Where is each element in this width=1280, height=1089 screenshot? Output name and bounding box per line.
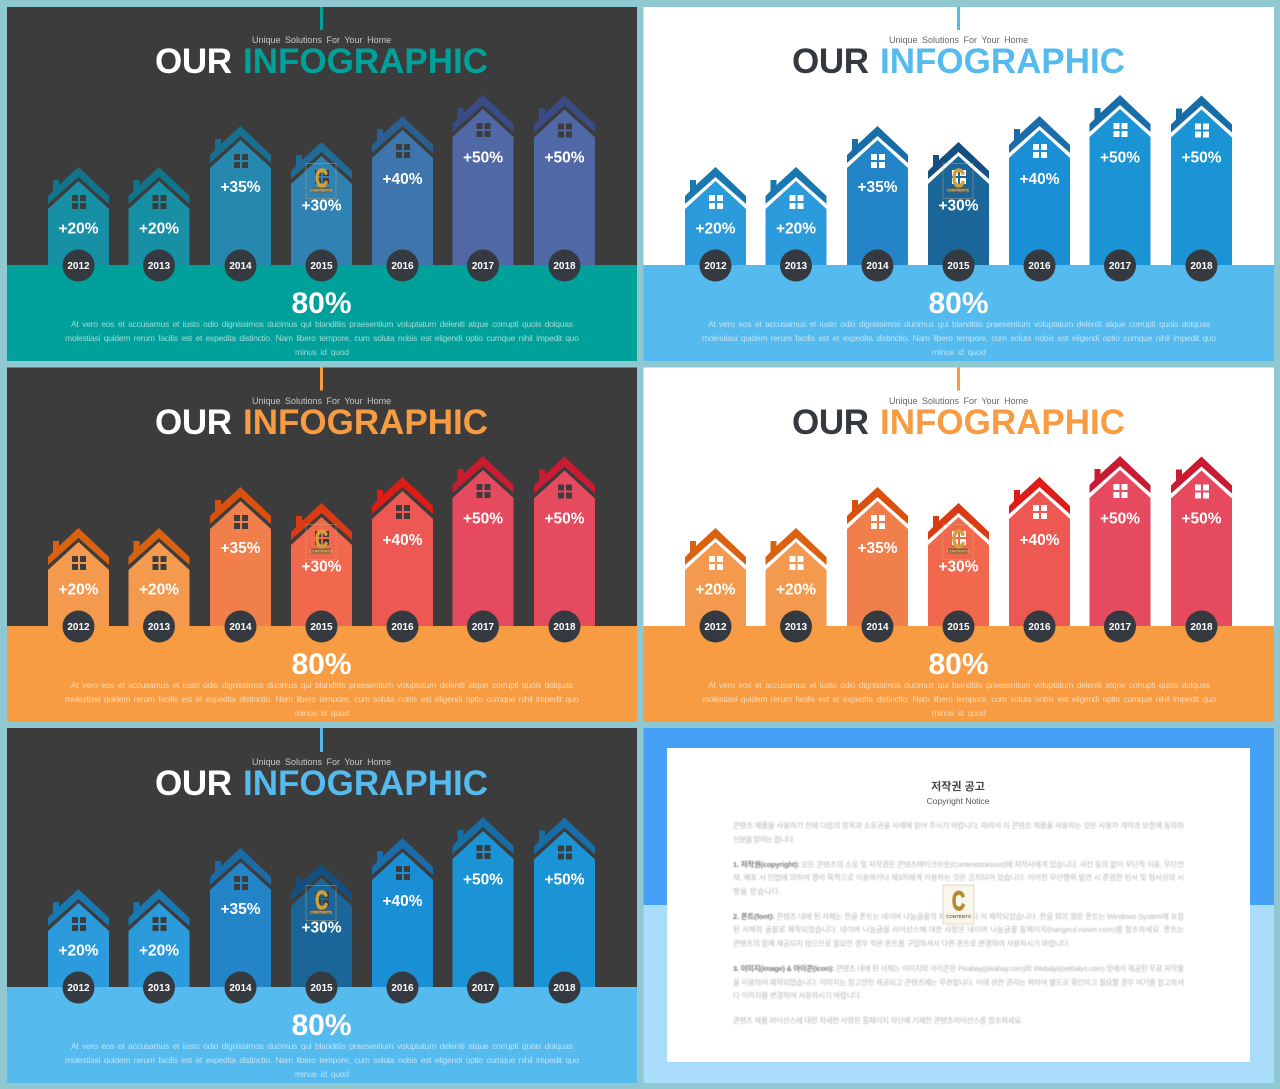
house 2012: 2012 [67, 622, 90, 633]
house 2014: +35% [220, 901, 261, 918]
notice text: 2. 폰트(font): 콘텐츠 내에 된 서체는 한글 폰트는 네이버 나눔글꼴의 저작물입니다 이 제작되었습니다. 한글 외의 영문 폰트는 Windows System에 포함 [733, 912, 1184, 921]
house 2014: 2014 [866, 622, 889, 633]
watermark logo [306, 524, 336, 560]
notice text: 콘텐츠의 함께 제공되지 않으므로 필요한 경우 적은 폰트를 구입하셔서 다른 폰트로 변경하여 사용하시기 바랍니다. [733, 939, 1070, 948]
title: OUR [155, 764, 232, 803]
body text: molestiasi quidem rerum facilis est et expedita distinctio. Nam libero tempore, cum soluta nobis est eligendi optio cumque nihil impedit quo [65, 694, 579, 704]
watermark logo: CONTENTS [946, 914, 971, 919]
body text: molestiasi quidem rerum facilis est et expedita distinctio. Nam libero tempore, cum soluta nobis est eligendi optio cumque nihil impedit quo [65, 1055, 579, 1065]
body text: At vero eos et accusamus et iusto odio dignissimos ducimus qui blanditiis praesentium voluptatum deleniti atque corrupti quois dolquas [71, 319, 573, 329]
watermark logo [306, 163, 336, 198]
house 2018: 2018 [1190, 261, 1213, 272]
body text: minus id quod [295, 1069, 349, 1079]
house 2013: 2013 [785, 622, 808, 633]
body text [65, 319, 579, 357]
subtitle: Unique Solutions For Your Home [889, 35, 1028, 45]
house 2013 [128, 889, 190, 1004]
house 2017 [452, 456, 514, 642]
top tick [957, 7, 960, 30]
top tick [320, 7, 323, 30]
big percentage: 80% [291, 1009, 352, 1042]
house 2015: +30% [301, 198, 342, 214]
house 2014: 2014 [229, 622, 252, 633]
title: INFOGRAPHIC [243, 764, 488, 803]
house 2017: +50% [1100, 510, 1140, 528]
big percentage: 80% [291, 648, 352, 681]
title: OUR [792, 42, 869, 81]
house 2016 [372, 838, 433, 1004]
title: OUR [792, 403, 869, 442]
house 2013 [128, 528, 190, 642]
house 2012: 2012 [67, 261, 90, 272]
house 2015: +30% [301, 558, 342, 576]
house 2017 [452, 95, 514, 282]
notice text: 1. 저작권(copyright): 모든 콘텐츠의 소유 및 저작권은 콘텐츠메이크아웃(Contentstokeout)에 저작사에게 있습니다. 사전 동의 없이 무단적 이용, 무단전 [733, 860, 1184, 869]
top tick [957, 368, 960, 390]
house 2012: +20% [58, 942, 99, 960]
house 2016 [1009, 477, 1070, 642]
panel: teal dark variant [7, 7, 637, 361]
house 2014 [847, 126, 908, 282]
house 2013: 2013 [148, 261, 171, 272]
panel: orange dark variant [7, 368, 637, 722]
house 2012 [48, 889, 109, 1004]
notice text: 3. 이미지(image) & 아이콘(icon): 콘텐츠 내에 된 서체는 이미지와 아이콘은 Pixabay(pixabay.com)와 Webalys(webalys.com) 등에서 제공된 무료 저작물 [733, 964, 1184, 973]
house 2013 [766, 167, 826, 282]
house 2014: +35% [220, 179, 261, 196]
notice text: 재, 배포 시 민법에 의하여 영리 목적으로 이용하거나 제3자에게 이용하는 것은 금지되어 있습니다. 이러한 무단행위 발견 시 준엄한 민사 및 형사상의 시 [733, 873, 1184, 882]
house 2012: 2012 [67, 983, 90, 994]
house 2017: +50% [1100, 150, 1140, 166]
house 2014 [210, 848, 271, 1004]
house 2017: +50% [463, 872, 503, 888]
house 2018 [1171, 456, 1232, 642]
panel: copyright notice [644, 728, 1274, 1083]
watermark logo [943, 885, 974, 924]
house 2017 [452, 817, 514, 1004]
body text: molestiasi quidem rerum facilis est et expedita distinctio. Nam libero tempore, cum soluta nobis est eligendi optio cumque nihil impedit quo [702, 333, 1216, 343]
house 2016: +40% [1019, 171, 1060, 188]
house 2015: +30% [938, 198, 979, 214]
body text [65, 680, 579, 718]
house 2013: 2013 [785, 261, 808, 272]
house 2015: 2015 [947, 622, 970, 633]
notice text: 콘텐츠 제품 라이선스에 대한 자세한 사항은 홈페이지 하단에 기재한 콘텐츠라이선스를 참조하세요. [733, 1016, 1023, 1025]
house 2018: 2018 [553, 622, 576, 633]
house 2013: +20% [776, 582, 816, 598]
house 2014: 2014 [229, 261, 252, 272]
house 2018 [1171, 96, 1232, 282]
body text: minus id quod [295, 708, 349, 718]
title: INFOGRAPHIC [243, 403, 488, 442]
house 2015: +30% [938, 558, 979, 576]
big percentage: 80% [291, 287, 352, 320]
ground band [644, 626, 1274, 722]
house 2012: 2012 [704, 622, 727, 633]
house 2014: 2014 [229, 983, 252, 994]
house 2015 [291, 142, 352, 282]
house 2018: 2018 [1190, 622, 1213, 633]
ground band [7, 265, 637, 361]
house 2015: +30% [301, 920, 342, 936]
house 2012: +20% [695, 220, 736, 238]
watermark logo [306, 885, 336, 920]
house 2018: +50% [544, 872, 585, 888]
house 2015: 2015 [310, 983, 333, 994]
notice text: 콘텐츠 제품을 사용하기 전에 다음의 항목과 소유권을 사례에 읽어 주시기 바랍니다. 따라서 이 콘텐츠 제품을 사용하는 것은 사용자 계약과 보증에 동의하 [733, 821, 1184, 830]
big percentage: 80% [928, 287, 989, 320]
house 2014 [210, 126, 271, 282]
panel: orange light variant [644, 368, 1274, 722]
house 2017 [1090, 456, 1150, 642]
white notice card [667, 748, 1250, 1062]
house 2018: +50% [1181, 150, 1222, 166]
house 2016: 2016 [391, 261, 414, 272]
house 2017: +50% [463, 510, 503, 528]
house 2014: +35% [220, 540, 261, 557]
house 2017: 2017 [1109, 261, 1132, 272]
house 2017: 2017 [472, 983, 495, 994]
house 2014: +35% [857, 179, 898, 196]
house 2012: 2012 [704, 261, 727, 272]
watermark logo [943, 163, 973, 198]
house 2016: +40% [1019, 532, 1060, 549]
house 2015: 2015 [310, 622, 333, 633]
house 2015 [928, 503, 989, 642]
notice heading: 저작권 공고 [931, 779, 985, 793]
house 2016: +40% [382, 532, 423, 549]
house 2017: 2017 [1109, 622, 1132, 633]
house 2016 [372, 477, 433, 642]
house 2016: 2016 [391, 983, 414, 994]
subtitle: Unique Solutions For Your Home [252, 757, 391, 767]
house 2015: 2015 [310, 261, 333, 272]
house 2013: +20% [776, 220, 816, 238]
house 2015 [291, 503, 352, 642]
house 2018: +50% [1181, 510, 1222, 528]
title: INFOGRAPHIC [880, 42, 1125, 81]
panel: blue light variant [644, 7, 1274, 361]
body text: At vero eos et accusamus et iusto odio dignissimos ducimus qui blanditiis praesentium voluptatum deleniti atque corrupti quois dolquas [708, 680, 1210, 690]
top tick [320, 368, 323, 390]
notice subheading: Copyright Notice [927, 796, 990, 806]
house 2016 [1009, 116, 1070, 282]
house 2013 [766, 528, 826, 642]
house 2017: 2017 [472, 622, 495, 633]
house 2012 [685, 167, 746, 282]
house 2017: +50% [463, 150, 503, 166]
body text: At vero eos et accusamus et iusto odio dignissimos ducimus qui blanditiis praesentium voluptatum deleniti atque corrupti quois dolquas [708, 319, 1210, 329]
big percentage: 80% [928, 648, 989, 681]
house 2012: +20% [58, 582, 99, 598]
panel: blue dark variant [7, 728, 637, 1083]
house 2015 [928, 142, 989, 282]
house 2012: +20% [58, 220, 99, 238]
notice text: 다 이미지를 변경하여 사용하시기 바랍니다. [733, 991, 862, 1000]
house 2013: +20% [139, 220, 179, 238]
subtitle: Unique Solutions For Your Home [889, 396, 1028, 406]
body text: minus id quod [932, 708, 986, 718]
body text [702, 319, 1216, 357]
watermark logo: C [952, 886, 965, 916]
house 2017 [1090, 95, 1150, 282]
body text: At vero eos et accusamus et iusto odio dignissimos ducimus qui blanditiis praesentium voluptatum deleniti atque corrupti quois dolquas [71, 680, 573, 690]
notice text: 신분을 밝히는 합니다. [733, 835, 795, 844]
lower background band [644, 905, 1274, 1083]
body text [702, 680, 1216, 718]
ground band [644, 265, 1274, 361]
house 2012: +20% [695, 582, 736, 598]
house 2014 [210, 487, 271, 642]
title: OUR [155, 42, 232, 81]
house 2014 [847, 487, 908, 642]
house 2013: +20% [139, 942, 179, 960]
house 2016: 2016 [1028, 261, 1051, 272]
watermark logo [943, 524, 973, 560]
ground band [7, 987, 637, 1083]
house 2018 [534, 818, 595, 1004]
notice text: 된 서체의 글꼴로 제작되었습니다. 네이버 나눔글꼴 라이선스에 대한 사항은 네이버 나눔글꼴 홈페이지(hangeul.naver.com)를 참조하세요. 폰트는 [733, 925, 1184, 934]
house 2012 [48, 528, 109, 642]
body text: molestiasi quidem rerum facilis est et expedita distinctio. Nam libero tempore, cum soluta nobis est eligendi optio cumque nihil impedit quo [702, 694, 1216, 704]
title: INFOGRAPHIC [880, 403, 1125, 442]
house 2013: 2013 [148, 983, 171, 994]
house 2012 [48, 167, 109, 282]
house 2015 [291, 864, 352, 1004]
subtitle: Unique Solutions For Your Home [252, 35, 391, 45]
house 2012 [685, 528, 746, 642]
house 2016: +40% [382, 171, 423, 188]
house 2016: 2016 [391, 622, 414, 633]
house 2018: +50% [544, 510, 585, 528]
notice text: 을 이용하여 제작되었습니다. 이미지는 참고만한 제공되고 콘텐츠에는 무관합니다. 이에 관한 권리는 위하여 별도로 확인하고 필요할 경우 여기를 참고하셔 [733, 978, 1184, 987]
body text [65, 1041, 579, 1079]
house 2018 [534, 456, 595, 642]
top tick [320, 728, 323, 752]
body text: minus id quod [932, 347, 986, 357]
house 2013: +20% [139, 582, 179, 598]
house 2016 [372, 116, 433, 282]
house 2017: 2017 [472, 261, 495, 272]
house 2013: 2013 [148, 622, 171, 633]
house 2015: 2015 [947, 261, 970, 272]
title: INFOGRAPHIC [243, 42, 488, 81]
house 2016: +40% [382, 893, 423, 910]
house 2013 [128, 167, 190, 282]
body text: minus id quod [295, 347, 349, 357]
house 2014: +35% [857, 540, 898, 557]
notice text [733, 821, 1184, 1025]
house 2014: 2014 [866, 261, 889, 272]
house 2018 [534, 96, 595, 282]
notice text: 행을 받습니다. [733, 887, 781, 896]
body text: At vero eos et accusamus et iusto odio dignissimos ducimus qui blanditiis praesentium voluptatum deleniti atque corrupti quois dolquas [71, 1041, 573, 1051]
body text: molestiasi quidem rerum facilis est et expedita distinctio. Nam libero tempore, cum soluta nobis est eligendi optio cumque nihil impedit quo [65, 333, 579, 343]
house 2018: 2018 [553, 983, 576, 994]
house 2018: 2018 [553, 261, 576, 272]
house 2018: +50% [544, 150, 585, 166]
title: OUR [155, 403, 232, 442]
subtitle: Unique Solutions For Your Home [252, 396, 391, 406]
house 2016: 2016 [1028, 622, 1051, 633]
ground band [7, 626, 637, 722]
